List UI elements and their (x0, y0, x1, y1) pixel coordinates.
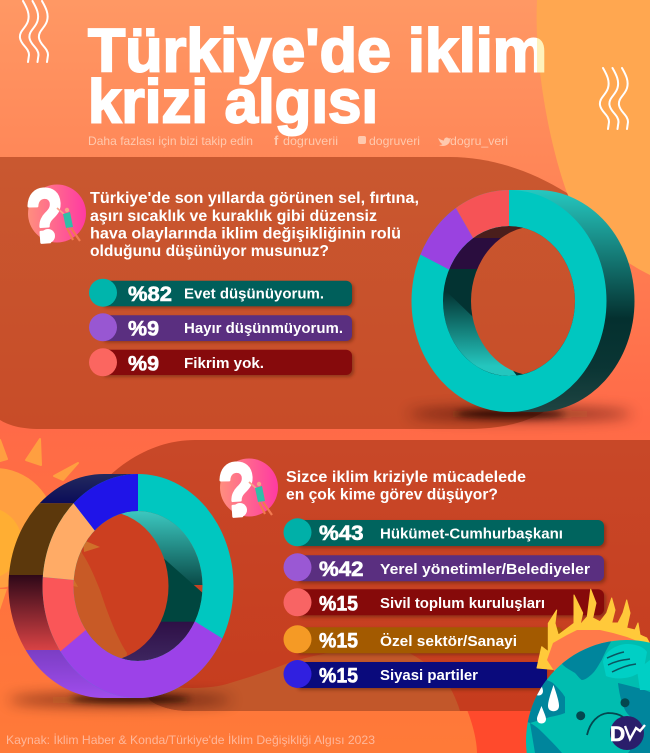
donut chart 1 (400, 180, 634, 420)
title: krizi algısı (88, 68, 378, 136)
donut 1 inner wall (443, 226, 575, 376)
donut 1 front segments (412, 190, 606, 412)
legend row: %9 no: %9 (128, 318, 159, 340)
panel: question 2 background (108, 440, 650, 711)
question 2 text (286, 469, 526, 504)
donut 1 extruded side (440, 190, 634, 412)
question 1 text: olduğunu düşünüyor musunuz? (90, 243, 329, 260)
follow line: dogruveri (369, 134, 420, 148)
legend row: %15 private sector: Özel sektör/Sanayi (380, 633, 517, 650)
legend row: %9 no opinion: Fikrim yok. (184, 356, 264, 372)
question 2 text: Sizce iklim kriziyle mücadelede (286, 469, 526, 486)
legend row: %15 political parties: Siyasi partiler (380, 668, 478, 684)
logo: D (610, 723, 625, 746)
donut 2 ground shadow (8, 694, 232, 706)
donut 2 inner wall (74, 511, 202, 661)
title: Türkiye'de iklim (88, 16, 547, 84)
legend row: %9 no opinion: %9 (128, 352, 159, 376)
follow line: f (274, 133, 279, 148)
legend row: %82: Evet düşünüyorum. (184, 286, 324, 302)
flames (537, 589, 650, 670)
legend row: %42: Yerel yönetimler/Belediyeler (380, 562, 590, 578)
legend row: %15 private sector: %15 (319, 629, 358, 652)
follow line: Daha fazlası için bizi takip edin (88, 134, 253, 148)
donut 2 extruded side (0, 470, 140, 700)
legend row: %43: %43 (319, 522, 364, 545)
question 2 icon (216, 446, 278, 534)
legend row: %42: %42 (319, 558, 364, 581)
follow line (88, 133, 508, 148)
legend row: %15 political parties: %15 (319, 664, 358, 687)
follow line: dogru_veri (450, 134, 508, 148)
sun illustration (0, 439, 78, 610)
panel: question 1 background (0, 157, 590, 429)
legend row: %82: %82 (128, 283, 172, 306)
legend row: %9 no: Hayır düşünmüyorum. (184, 321, 343, 337)
legend row: %9 no opinion (89, 348, 354, 377)
follow line: dogruverii (283, 134, 338, 148)
question 2 icon: ? (216, 446, 259, 534)
heat waves: top right (600, 68, 628, 129)
legend row: %9 no (89, 313, 354, 342)
question 1 text (90, 190, 419, 260)
legend row: %15 civil society (284, 588, 606, 618)
title (88, 16, 547, 136)
earth illustration (520, 589, 650, 753)
background blob: top right (537, 0, 650, 275)
question 1 text: hava olaylarında iklim değişikliğinin rolü (90, 226, 401, 242)
donut 2 front segments (42, 474, 234, 698)
legend row: %15 private sector (284, 625, 562, 655)
question 2 text: en çok kime görev düşüyor? (286, 486, 498, 504)
question 1 text: Türkiye'de son yıllarda görünen sel, fırtına, (90, 190, 419, 207)
question 1 text: aşırı sıcaklık ve kuraklık gibi düzensiz (90, 208, 377, 225)
legend row: %82 (89, 279, 354, 308)
legend row: %43: Hükümet-Cumhurbaşkanı (380, 527, 563, 543)
donut chart 2 (0, 470, 245, 706)
legend row: %15 civil society: Sivil toplum kuruluşları (380, 596, 545, 612)
background: bright red area bottom right (407, 600, 650, 753)
logo (610, 716, 645, 750)
question 1 icon: ? (24, 172, 67, 260)
lighter band under panel 2 (150, 650, 460, 711)
legend row: %42 (284, 553, 606, 584)
legend row: %15 political parties (284, 660, 547, 690)
flames: inner orange (547, 630, 650, 680)
legend row: %43 (284, 518, 606, 548)
source: Kaynak: İklim Haber & Konda/Türkiye'de İklim Değişikliği Algısı 2023 (6, 733, 375, 747)
donut 1 ground shadow (408, 408, 632, 420)
donut 2 hole (74, 514, 168, 658)
globe (520, 636, 650, 753)
heat waves: top left (20, 1, 48, 62)
legend row: %15 civil society: %15 (319, 593, 358, 616)
question 1 icon (24, 172, 86, 260)
